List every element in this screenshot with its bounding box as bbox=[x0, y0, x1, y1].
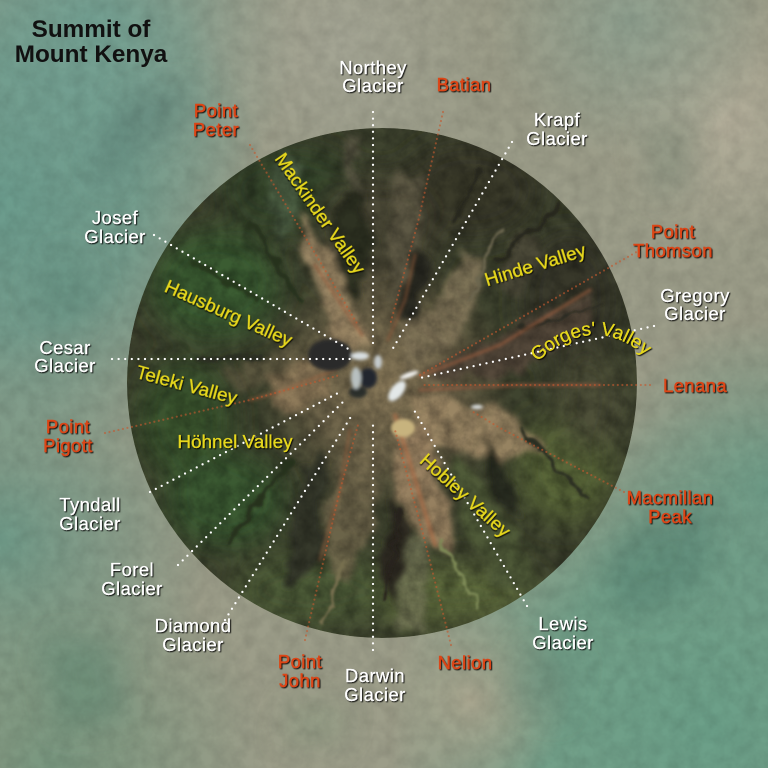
gullies and ridge lines bbox=[190, 170, 600, 620]
ridge rust streaks bbox=[250, 255, 600, 560]
Forel Glacier: Glacier bbox=[101, 578, 163, 599]
Gorges Valley: Gorges' Valley bbox=[532, 322, 653, 360]
Point Pigott: Pigott bbox=[43, 435, 93, 456]
Josef Glacier bbox=[84, 207, 146, 247]
Northey Glacier: Northey bbox=[339, 57, 407, 78]
Northey Glacier: Glacier bbox=[342, 75, 404, 96]
glacier leader lines (white dotted) bbox=[112, 112, 654, 650]
glacier labels bbox=[34, 57, 730, 705]
Point John: John bbox=[279, 670, 321, 691]
Darwin Glacier: Glacier bbox=[344, 684, 406, 705]
Darwin Glacier bbox=[344, 665, 406, 705]
Hausburg Valley: Hausburg Valley bbox=[161, 276, 296, 352]
Lewis Glacier bbox=[532, 613, 594, 653]
summit snow and shadow bbox=[308, 339, 483, 437]
Forel Glacier: Forel bbox=[110, 559, 154, 580]
Tyndall Glacier bbox=[59, 494, 121, 534]
Gregory Glacier: Glacier bbox=[664, 303, 726, 324]
Northey Glacier bbox=[339, 57, 407, 96]
panel: summit disc bbox=[127, 128, 637, 638]
Macmillan Peak: Peak bbox=[648, 506, 692, 527]
Hinde Valley: Hinde Valley bbox=[482, 240, 589, 291]
Diamond Glacier: Diamond bbox=[155, 615, 231, 636]
Darwin Glacier: Darwin bbox=[345, 665, 405, 686]
Macmillan Peak bbox=[627, 487, 713, 527]
Point Pigott bbox=[43, 416, 93, 456]
Cesar Glacier: Cesar bbox=[39, 337, 91, 358]
Krapf Glacier bbox=[526, 109, 588, 149]
Lewis Glacier: Glacier bbox=[532, 632, 594, 653]
Forel Glacier bbox=[101, 559, 163, 599]
grain texture bbox=[127, 128, 637, 638]
Point Peter bbox=[193, 100, 239, 140]
peak labels bbox=[43, 74, 727, 691]
terrain patches bbox=[137, 140, 625, 630]
Point John bbox=[278, 651, 322, 691]
title: Mount Kenya bbox=[15, 41, 168, 68]
Krapf Glacier: Glacier bbox=[526, 128, 588, 149]
Point John: Point bbox=[278, 651, 322, 672]
peak leader lines (red dotted) bbox=[105, 112, 650, 645]
Diamond Glacier bbox=[155, 615, 231, 655]
disc base bbox=[127, 128, 637, 638]
Mackinder Valley: Mackinder Valley bbox=[270, 149, 369, 279]
Point Thomson bbox=[633, 221, 713, 261]
Lewis Glacier: Lewis bbox=[538, 613, 588, 634]
Teleki Valley: Teleki Valley bbox=[134, 362, 240, 409]
Josef Glacier: Glacier bbox=[84, 226, 146, 247]
Gregory Glacier bbox=[660, 285, 730, 324]
Tyndall Glacier: Glacier bbox=[59, 513, 121, 534]
Batian: Batian bbox=[437, 74, 491, 95]
Lenana: Lenana bbox=[663, 375, 727, 396]
Nelion: Nelion bbox=[438, 652, 492, 673]
Point Thomson: Point bbox=[651, 221, 695, 242]
Höhnel Valley: Höhnel Valley bbox=[177, 432, 293, 453]
Hobley Valley: Hobley Valley bbox=[415, 450, 515, 542]
Point Pigott: Point bbox=[46, 416, 90, 437]
Cesar Glacier: Glacier bbox=[34, 355, 96, 376]
Gregory Glacier: Gregory bbox=[660, 285, 730, 306]
ridge and valley shapes bbox=[225, 135, 590, 630]
valley labels bbox=[134, 149, 653, 542]
Josef Glacier: Josef bbox=[92, 207, 139, 228]
Cesar Glacier bbox=[34, 337, 96, 376]
Point Peter: Point bbox=[194, 100, 238, 121]
Point Peter: Peter bbox=[193, 119, 239, 140]
Point Thomson: Thomson bbox=[633, 240, 713, 261]
Diamond Glacier: Glacier bbox=[162, 634, 224, 655]
Macmillan Peak: Macmillan bbox=[627, 487, 713, 508]
title bbox=[15, 16, 168, 68]
Tyndall Glacier: Tyndall bbox=[59, 494, 121, 515]
Krapf Glacier: Krapf bbox=[534, 109, 581, 130]
title: Summit of bbox=[32, 16, 151, 43]
